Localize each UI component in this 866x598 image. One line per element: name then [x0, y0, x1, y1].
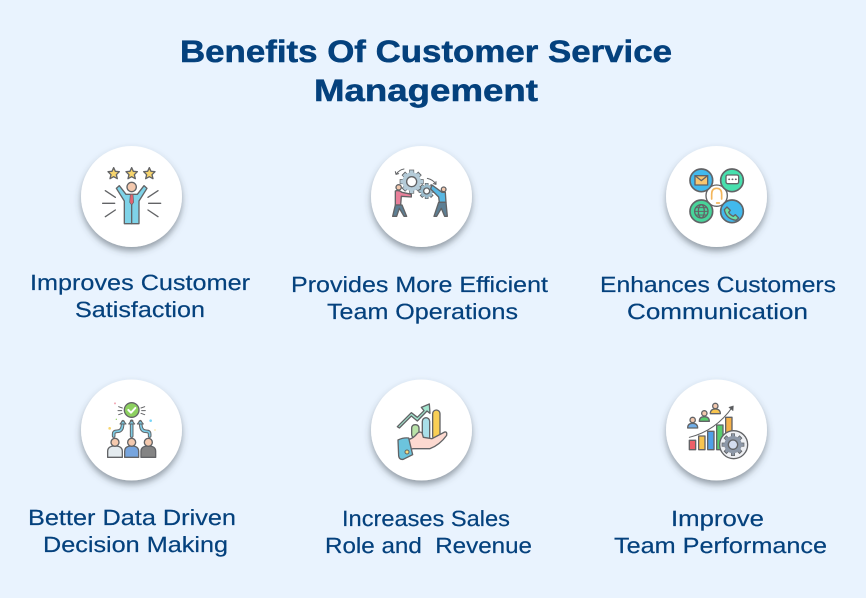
label: Communication: [627, 299, 808, 324]
title: Benefits Of Customer Service: [180, 34, 672, 69]
icon circle: communication channels: [666, 146, 767, 247]
icon circle: satisfied employee: [81, 146, 182, 247]
panel: improves customer satisfaction: [30, 146, 250, 322]
label: Role and Revenue: [325, 533, 532, 558]
panel: enhances customers communication: [600, 146, 836, 324]
icon circle: hand with growth chart: [371, 380, 472, 480]
label: [28, 505, 236, 557]
panel: improve team performance: [614, 380, 827, 558]
label: Improves Customer: [30, 270, 250, 295]
icon circle: people turning gears: [371, 146, 472, 247]
icon circle: group decision: [81, 380, 182, 480]
label: Satisfaction: [75, 297, 205, 322]
label: [325, 506, 532, 558]
icon circle: team performance chart: [666, 380, 767, 480]
label: [30, 270, 250, 322]
label: [291, 272, 548, 324]
panel: more efficient team operations: [291, 146, 548, 324]
label: Increases Sales: [342, 506, 510, 531]
label: Enhances Customers: [600, 272, 836, 297]
label: [614, 506, 827, 558]
panel: better data driven decision making: [28, 380, 236, 557]
label: Decision Making: [43, 532, 228, 557]
title: Management: [314, 73, 538, 108]
label: Team Performance: [614, 533, 827, 558]
label: Better Data Driven: [28, 505, 236, 530]
panel: increases sales role and revenue: [325, 380, 532, 558]
label: Improve: [671, 506, 764, 531]
label: Team Operations: [327, 299, 518, 324]
label: Provides More Efficient: [291, 272, 548, 297]
title: [180, 34, 672, 108]
label: [600, 272, 836, 324]
